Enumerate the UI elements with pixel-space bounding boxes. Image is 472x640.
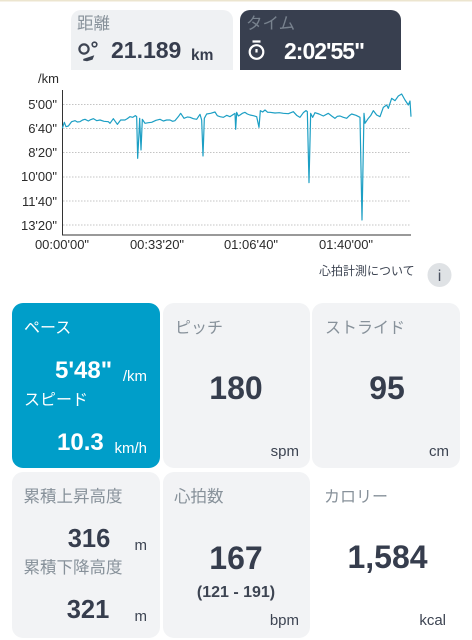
- panel: heart rate: [163, 472, 310, 638]
- value: heart rate: 167: [209, 540, 263, 576]
- label: time: タイム: [246, 14, 295, 33]
- chart: pace over time: [21, 71, 411, 252]
- y axis labels: 6'40": [28, 121, 57, 136]
- y axis labels: 8'20": [28, 145, 57, 160]
- panel: elevation: [12, 472, 160, 638]
- x axis labels: 01:40'00": [319, 237, 373, 252]
- y axis labels: [21, 97, 57, 233]
- y axis labels: 10'00": [21, 169, 57, 184]
- heart rate note: [319, 263, 452, 287]
- value: time: 2:02'55": [284, 38, 364, 64]
- card: time: [240, 10, 401, 70]
- value: speed: 10.3: [57, 429, 104, 456]
- unit: km: km: [191, 47, 213, 64]
- unit: cm: cm: [429, 443, 449, 460]
- y axis unit: /km: [38, 71, 59, 86]
- label: heart rate: 心拍数: [174, 487, 224, 506]
- pace line: [62, 94, 411, 220]
- unit: kcal: kcal: [419, 612, 446, 629]
- unit: per km: /km: [123, 368, 147, 385]
- label: elevation gain: 累積上昇高度: [24, 487, 122, 506]
- value: cadence: 180: [209, 370, 263, 406]
- label: elevation loss: 累積下降高度: [24, 558, 122, 577]
- label: speed: スピード: [24, 392, 88, 409]
- y axis labels: 5'00": [28, 97, 57, 112]
- value: calories: 1,584: [347, 539, 428, 575]
- heart rate note: 心拍計測について: [319, 263, 415, 278]
- y axis labels: 11'40": [22, 194, 57, 209]
- card: distance: [71, 10, 233, 70]
- y axis labels: 13'20": [21, 218, 57, 233]
- unit: metres: m: [134, 537, 147, 554]
- label: distance: 距離: [77, 14, 110, 33]
- panel: calories: [312, 472, 460, 638]
- x axis labels: 00:33'20": [130, 237, 184, 252]
- icon: stopwatch: [250, 42, 263, 59]
- unit: bpm: bpm: [270, 612, 299, 629]
- panel: pace and speed: [12, 303, 160, 468]
- value: elevation loss: 321: [67, 596, 109, 624]
- x axis labels: 00:00'00": [35, 237, 89, 252]
- icon: info: i: [438, 268, 441, 285]
- icon: route pin: [79, 42, 97, 60]
- label: stride: ストライド: [325, 320, 405, 337]
- value: stride: 95: [369, 370, 405, 406]
- heart rate range: (121 - 191): [197, 584, 275, 601]
- unit: metres: m: [134, 608, 147, 625]
- value: distance: 21.189: [111, 37, 181, 63]
- unit: km per hour: km/h: [114, 440, 147, 457]
- value: pace: 5'48": [55, 357, 112, 384]
- label: cadence: ピッチ: [175, 320, 223, 337]
- axes: [62, 90, 411, 235]
- label: calories: カロリー: [324, 489, 388, 506]
- unit: spm: spm: [271, 443, 299, 460]
- value: elevation gain: 316: [68, 525, 110, 553]
- panel: stride: [312, 303, 460, 468]
- label: pace: ペース: [24, 320, 71, 337]
- panel: cadence: [163, 303, 310, 468]
- x axis labels: [35, 237, 373, 252]
- x axis labels: 01:06'40": [224, 237, 278, 252]
